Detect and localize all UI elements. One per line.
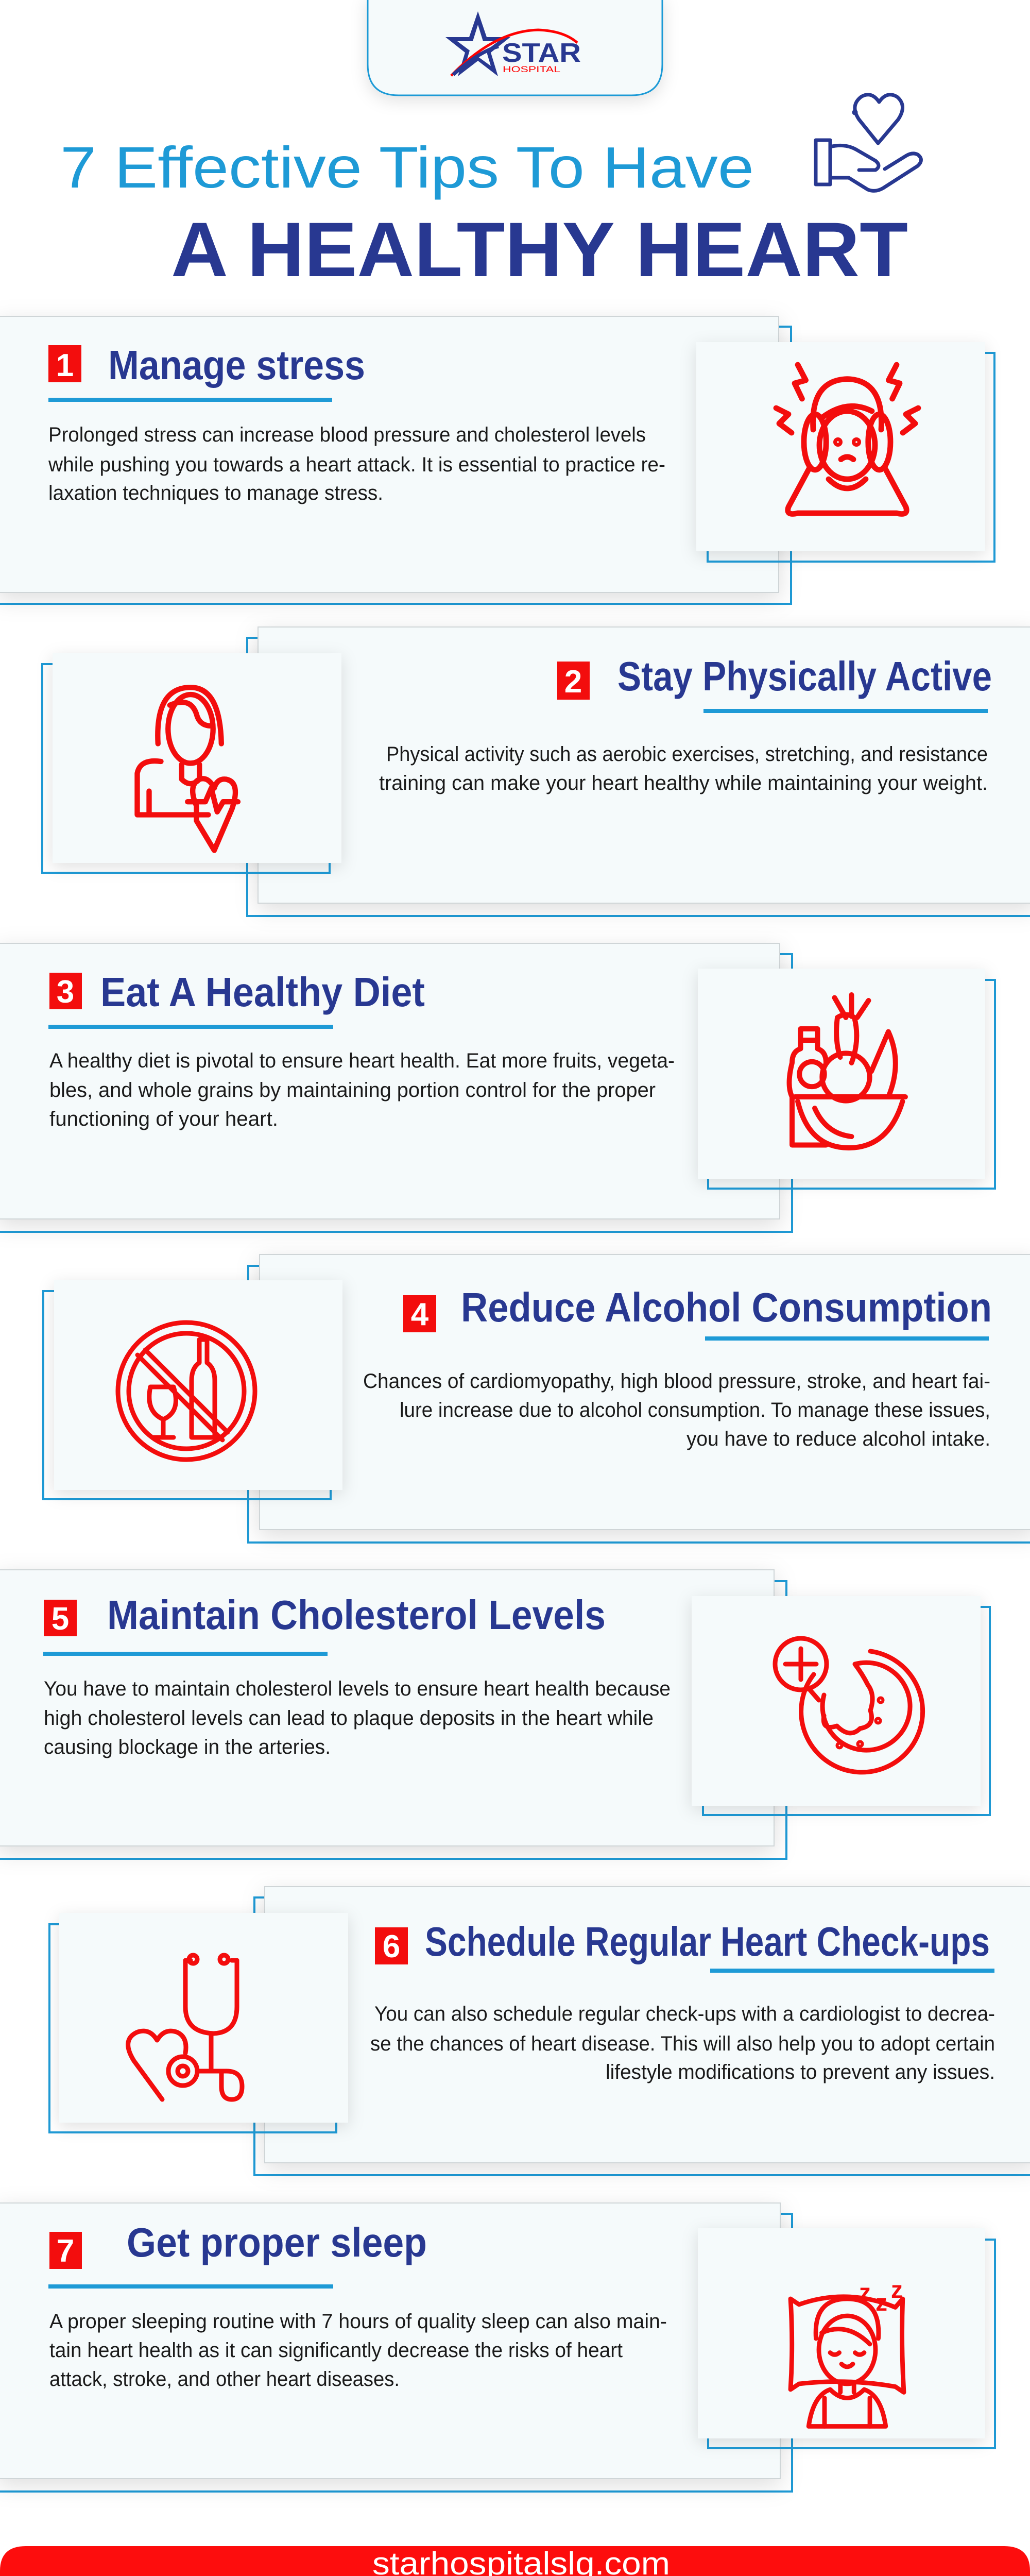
- badge 1: [48, 345, 81, 383]
- badge 5: 5: [52, 1601, 69, 1637]
- badge 5: [44, 1600, 77, 1637]
- panel 7: Get proper sleep: [0, 2203, 995, 2492]
- body 5: causing blockage in the arteries.: [44, 1736, 331, 1758]
- logo: star: [445, 11, 577, 76]
- body 3: [49, 1049, 675, 1130]
- body 6: You can also schedule regular check-ups with a cardiologist to decrea-: [374, 2003, 995, 2025]
- badge 2: 2: [564, 664, 582, 700]
- body 7: A proper sleeping routine with 7 hours of quality sleep can also main-: [49, 2310, 667, 2333]
- badge 2: [557, 662, 590, 700]
- body 5: [44, 1677, 671, 1758]
- heading 1: Manage stress: [108, 342, 365, 388]
- panel 4: Reduce Alcohol Consumption: [43, 1255, 1030, 1543]
- body 4: lure increase due to alcohol consumption. To manage these issues,: [400, 1399, 990, 1421]
- panel 3: Eat A Healthy Diet: [0, 943, 995, 1232]
- icon card 5: artery: [692, 1596, 990, 1815]
- icon: hand holding heart: [816, 95, 921, 191]
- logo card: [368, 0, 662, 95]
- panel 2: Stay Physically Active: [42, 627, 1030, 916]
- icon card 7: sleeping person: z: [876, 2289, 887, 2316]
- body 5: high cholesterol levels can lead to plaque deposits in the heart while: [44, 1707, 654, 1730]
- icon card 2: person with heart: [42, 653, 341, 873]
- body 6: lifestyle modifications to prevent any issues.: [606, 2061, 995, 2083]
- badge 4: [403, 1295, 436, 1332]
- icon card 6: stethoscope and heart: [49, 1913, 348, 2132]
- footer bar: [0, 2546, 1030, 2576]
- badge 3: 3: [57, 974, 74, 1010]
- badge 6: [375, 1927, 408, 1964]
- icon card 7: sleeping person: z: [891, 2276, 903, 2303]
- icon card 1: stressed person: [696, 342, 994, 562]
- body 4: [363, 1370, 990, 1450]
- body 1: Prolonged stress can increase blood pressure and cholesterol levels: [48, 423, 646, 446]
- body 1: laxation techniques to manage stress.: [48, 482, 383, 504]
- badge 7: [49, 2232, 82, 2269]
- body 1: while pushing you towards a heart attack. It is essential to practice re-: [48, 453, 665, 476]
- badge 1: 1: [56, 348, 74, 383]
- body 5: You have to maintain cholesterol levels to ensure heart health because: [44, 1677, 671, 1700]
- badge 6: 6: [383, 1929, 400, 1964]
- title line 2: A HEALTHY HEART: [171, 206, 908, 293]
- badge 4: 4: [411, 1297, 429, 1332]
- body 3: bles, and whole grains by maintaining portion control for the proper: [49, 1079, 656, 1101]
- body 7: tain heart health as it can significantly decrease the risks of heart: [49, 2339, 623, 2362]
- panel 5: Maintain Cholesterol Levels: [0, 1570, 990, 1859]
- panel 6: Schedule Regular Heart Check-ups: [49, 1887, 1030, 2175]
- body 7: attack, stroke, and other heart diseases.: [49, 2368, 400, 2391]
- logo text: HOSPITAL: [503, 64, 560, 74]
- body 3: functioning of your heart.: [49, 1108, 278, 1130]
- body 1: [48, 423, 665, 504]
- heading 7: Get proper sleep: [127, 2219, 427, 2265]
- body 2: Physical activity such as aerobic exercises, stretching, and resistance: [386, 743, 988, 766]
- badge 3: [49, 973, 82, 1010]
- logo text: STAR: [502, 38, 581, 68]
- heading 3: Eat A Healthy Diet: [100, 969, 425, 1015]
- body 3: A healthy diet is pivotal to ensure heart health. Eat more fruits, vegeta-: [49, 1049, 675, 1072]
- body 2: training can make your heart healthy while maintaining your weight.: [379, 772, 988, 794]
- body 2: [379, 743, 988, 794]
- body 6: se the chances of heart disease. This will also help you to adopt certain: [370, 2032, 995, 2055]
- zzz: z: [859, 2279, 871, 2306]
- body 7: [49, 2310, 667, 2391]
- icon card 7: sleeping person: [698, 2228, 995, 2448]
- icon card 4: no alcohol: [43, 1280, 342, 1499]
- body 6: [370, 2003, 995, 2083]
- body 4: you have to reduce alcohol intake.: [686, 1428, 990, 1450]
- heading 5: Maintain Cholesterol Levels: [107, 1592, 606, 1638]
- icon card 3: food bowl: [698, 969, 995, 1189]
- badge 7: 7: [57, 2233, 74, 2269]
- title line 1: 7 Effective Tips To Have: [60, 135, 754, 200]
- body 4: Chances of cardiomyopathy, high blood pressure, stroke, and heart fai-: [363, 1370, 990, 1393]
- panel 1: Manage stress: [0, 316, 994, 604]
